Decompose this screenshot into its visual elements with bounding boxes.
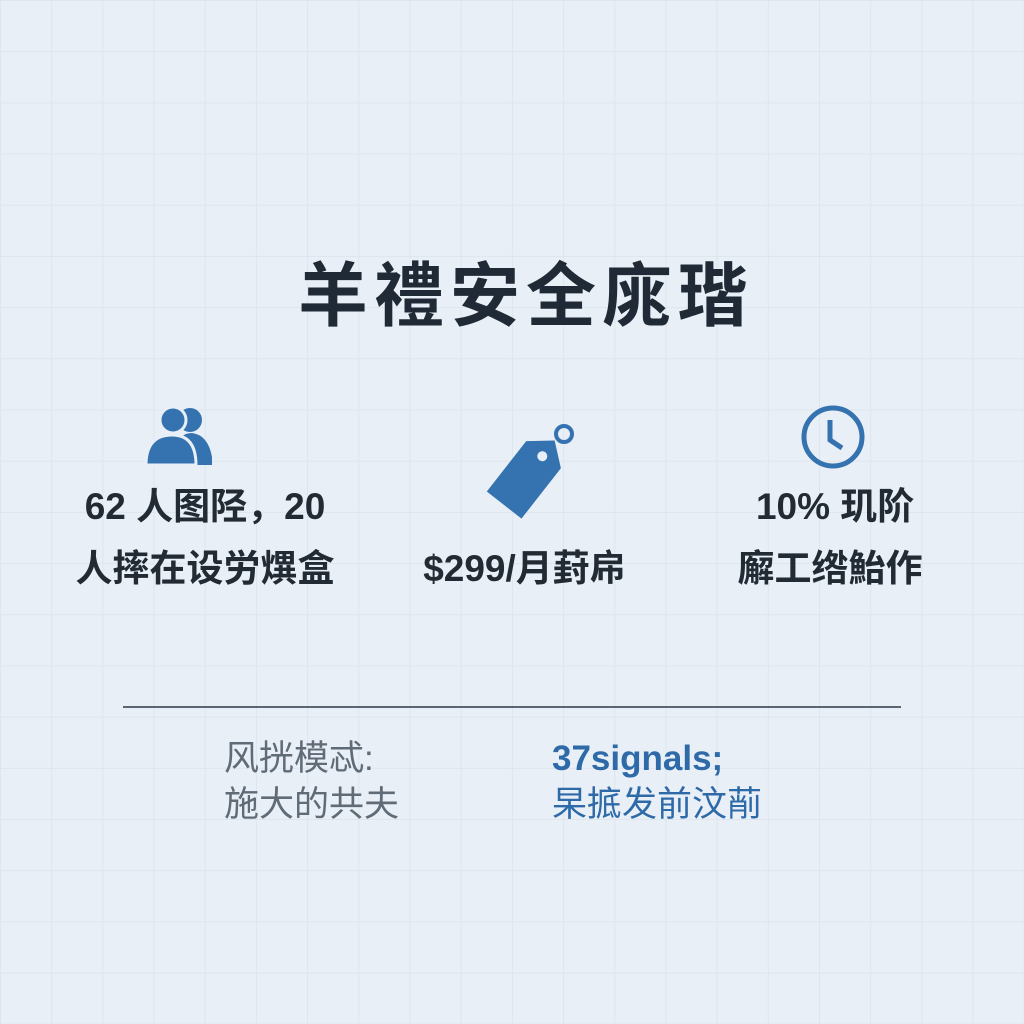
- text: 37signals: 杲掋发前汶萷: [552, 785, 762, 824]
- icon: people: [144, 408, 212, 466]
- text: model: [224, 739, 399, 824]
- title: 羊禮安全庣瑎: [298, 257, 754, 335]
- stat: team: 62 人图陉，20: [85, 486, 325, 527]
- text: 37signals: [552, 739, 762, 824]
- stat: percent: 廨工绺鮐作: [738, 548, 922, 589]
- icon: price tag: [486, 424, 574, 519]
- divider: [123, 706, 901, 708]
- stat: percent: [738, 486, 922, 589]
- text: model: 风挄模忒:: [224, 739, 374, 778]
- icon: clock: [802, 406, 864, 468]
- stat: team: [76, 486, 334, 589]
- stat: team: 人摔在设労熼盒: [76, 548, 334, 589]
- text: 37signals: 37signals;: [552, 739, 723, 778]
- stat: price: $299/月葑帍: [423, 548, 627, 589]
- stat: percent: 10% 玑阶: [756, 486, 914, 527]
- text: model: 施大的共夫: [224, 785, 399, 824]
